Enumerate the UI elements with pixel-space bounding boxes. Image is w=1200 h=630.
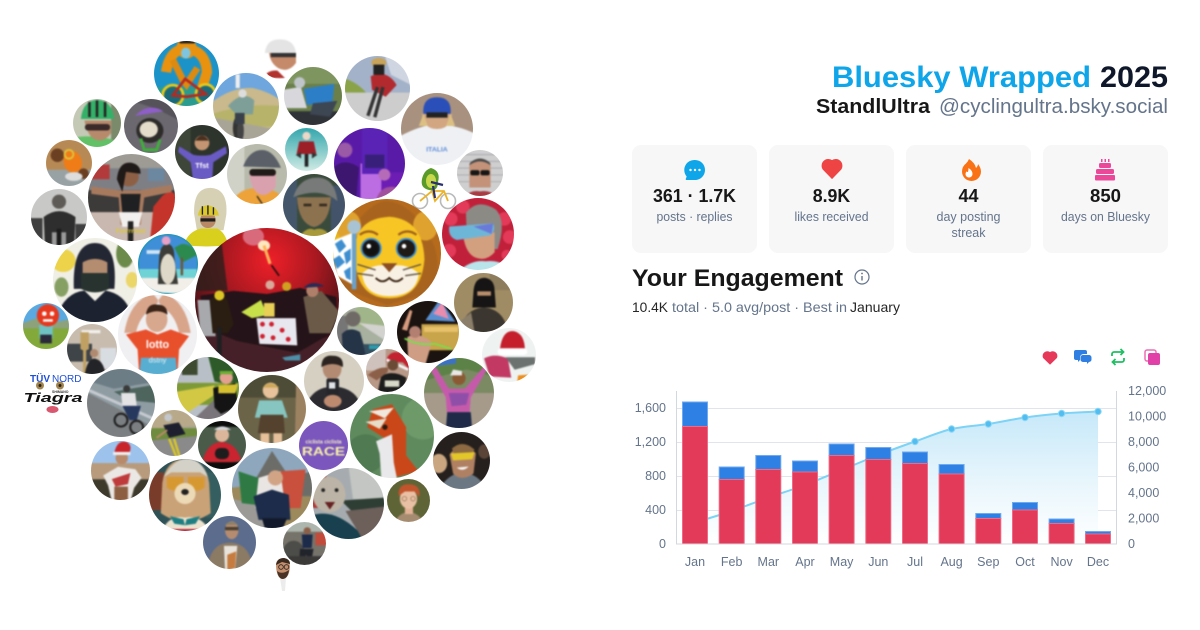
panel: likes received: 8.9K bbox=[813, 186, 850, 206]
month labels: Aug bbox=[940, 555, 963, 569]
panel: likes received bbox=[769, 145, 894, 253]
avatar: red jersey child rider bbox=[198, 421, 246, 469]
avatar: tree-lined rider with black and yellow kit bbox=[177, 357, 239, 419]
left axis labels: 800 bbox=[645, 469, 666, 483]
avatar: angry emoji over meadow bbox=[23, 303, 69, 349]
panel: posts and replies: posts · replies bbox=[656, 210, 732, 224]
month labels bbox=[685, 555, 1109, 569]
panel: days on Bluesky: days on Bluesky bbox=[1061, 210, 1151, 224]
title: 2025 bbox=[1100, 61, 1168, 94]
right axis labels: 12,000 bbox=[1128, 384, 1166, 398]
avatar: rider with hands heart in Lotto kit: dstny bbox=[149, 356, 167, 365]
month labels: Jan bbox=[685, 555, 705, 569]
logo: TÜV Nord Tiagra mashup: SHIMANO bbox=[52, 390, 69, 394]
avatar: rider with hands heart in Lotto kit: lotto bbox=[146, 339, 170, 351]
month labels: Mar bbox=[758, 555, 779, 569]
icon: quote copies bbox=[1145, 350, 1160, 365]
cumulative line bbox=[695, 412, 1098, 523]
avatar: santa on a bike bbox=[285, 128, 328, 171]
avatar: black and white cyclist bbox=[31, 189, 87, 245]
chart legend icons bbox=[1043, 349, 1160, 365]
logo: TÜV Nord Tiagra mashup: NORD bbox=[52, 374, 81, 385]
avatar: rider next to bike in garage bbox=[282, 522, 326, 564]
panel: posts and replies bbox=[632, 145, 757, 253]
avatar: green helmet rider bbox=[73, 99, 121, 147]
engagement summary bbox=[632, 299, 900, 315]
avatar: ciclista ciclista RACE badge bbox=[298, 420, 348, 470]
month labels: Dec bbox=[1087, 555, 1109, 569]
month labels: Feb bbox=[721, 555, 743, 569]
avatar: white helmet rider bbox=[264, 39, 297, 79]
title: Bluesky Wrapped bbox=[832, 61, 1091, 94]
panel: days on Bluesky: 850 bbox=[1090, 186, 1121, 206]
avatar: ciclista ciclista RACE badge: RACE bbox=[301, 444, 345, 458]
avatar: yellow bike climber bbox=[151, 410, 197, 456]
avatar: orange cartoon mouse bbox=[46, 140, 92, 186]
right axis labels: 8,000 bbox=[1128, 435, 1159, 449]
avatar: Italian flag rider with Dolomites bbox=[232, 448, 312, 528]
panel: day posting streak bbox=[906, 145, 1031, 253]
icon: birthday cake bbox=[1095, 159, 1115, 180]
avatar: red haired illustrated person bbox=[386, 478, 430, 522]
avatar: man in cap portrait bbox=[283, 174, 345, 236]
panel: day posting streak: streak bbox=[952, 226, 986, 240]
month labels: Sep bbox=[977, 555, 999, 569]
right axis labels: 2,000 bbox=[1128, 512, 1159, 526]
avatar: rider with hands heart in Lotto kit bbox=[118, 295, 197, 374]
avatar: Italia skinsuit with blue helmet: ITALIA bbox=[426, 147, 448, 154]
avatar: man with giant fork bbox=[67, 324, 117, 374]
month labels: Nov bbox=[1050, 555, 1073, 569]
avatar: man in dark hood on lemon wallpaper bbox=[53, 238, 137, 322]
avatar: man with visor on raspberries bbox=[442, 198, 514, 270]
avatar: purple jersey rider arms out bbox=[175, 125, 229, 179]
avatar: bucket hat and pink mask bbox=[227, 144, 287, 204]
avatar: rider in black vest at race: Forrrrrest bbox=[115, 228, 146, 235]
panel: posts and replies: 361 · 1.7K bbox=[653, 186, 736, 206]
avatar: yellow jersey rider bbox=[186, 188, 227, 246]
grid lines bbox=[676, 408, 1116, 510]
avatar: avocado riding bicycle bbox=[412, 168, 456, 210]
avatar: fur coat gent bbox=[202, 516, 256, 568]
month labels: Oct bbox=[1015, 555, 1035, 569]
right axis labels bbox=[1128, 384, 1166, 551]
cumulative area bbox=[695, 412, 1098, 544]
icon: speech bubble bbox=[684, 160, 705, 180]
right axis labels: 0 bbox=[1128, 537, 1135, 551]
chart: monthly engagement stacked bars with cumulative line bbox=[635, 384, 1166, 569]
avatar: santa hat cyclist with ag2r kit bbox=[90, 440, 150, 500]
user name and handle bbox=[816, 96, 1168, 118]
engagement summary: January bbox=[850, 299, 900, 315]
avatar: yellow visor in crowd bbox=[432, 432, 490, 488]
avatar: bearded memoji bbox=[274, 557, 292, 593]
user name and handle: @cyclingultra.bsky.social bbox=[939, 96, 1168, 118]
red like bars bbox=[682, 426, 1110, 544]
avatar: santa hat man in black tee bbox=[366, 349, 409, 392]
right axis labels: 4,000 bbox=[1128, 486, 1159, 500]
avatar: balaclava man with olive wall bbox=[454, 273, 513, 332]
icon: repost arrows bbox=[1112, 349, 1124, 365]
avatar: bear with cycling glasses bbox=[149, 459, 221, 531]
user name and handle: StandlUltra bbox=[816, 96, 931, 118]
avatar: rider with road view bbox=[87, 369, 155, 437]
left axis labels: 1,600 bbox=[635, 401, 666, 415]
avatar: orange monkey on bicycle bbox=[154, 41, 219, 106]
avatar: cyclist below Mont Ventoux bbox=[213, 73, 279, 139]
avatar: flag waver at night square bbox=[397, 301, 459, 363]
icon: flame bbox=[962, 159, 981, 181]
left axis labels bbox=[635, 401, 666, 551]
avatar: driver in car bbox=[337, 307, 385, 355]
blue reply bars bbox=[682, 402, 1110, 534]
avatar: santa hat fish bbox=[482, 328, 536, 382]
icon: like heart bbox=[1043, 352, 1057, 364]
avatar: purple tinted scene bbox=[334, 128, 405, 199]
logo: TÜV Nord Tiagra mashup: Tiagra bbox=[24, 390, 82, 405]
panel: day posting streak: 44 bbox=[958, 186, 978, 206]
right axis labels: 10,000 bbox=[1128, 410, 1166, 424]
avatar: crimson flare crowd on the Tour bbox=[195, 228, 339, 372]
avatar: pink rider celebrating bbox=[424, 358, 494, 428]
logo: TÜV Nord Tiagra mashup bbox=[24, 372, 82, 413]
avatar: rider in black vest at race bbox=[88, 154, 175, 241]
right axis labels: 6,000 bbox=[1128, 460, 1159, 474]
avatar: older man with sunglasses bbox=[457, 150, 503, 196]
avatar: purple jersey rider arms out: Tfst bbox=[195, 161, 209, 170]
avatar: Italia skinsuit with blue helmet bbox=[401, 93, 473, 165]
panel: likes received: likes received bbox=[794, 210, 869, 224]
icon: heart bbox=[822, 160, 842, 178]
axes bbox=[676, 391, 1116, 544]
avatar: ciclista ciclista RACE badge: ciclista ciclista bbox=[305, 439, 342, 445]
month labels: Apr bbox=[795, 555, 815, 569]
icon: info bbox=[855, 270, 869, 284]
left axis labels: 400 bbox=[645, 503, 666, 517]
avatar: emoji lion with Bavarian flag bbox=[333, 199, 441, 307]
panel: day posting streak: day posting bbox=[936, 210, 1001, 224]
left axis labels: 0 bbox=[659, 537, 666, 551]
avatar: red rider on mountain road bbox=[345, 56, 410, 121]
avatar: blurred cyclist in blue bbox=[284, 67, 342, 125]
heading: your engagement: Your Engagement bbox=[632, 265, 843, 292]
left axis labels: 1,200 bbox=[635, 435, 666, 449]
month labels: Jul bbox=[907, 555, 923, 569]
icon: reply bubbles bbox=[1074, 350, 1092, 364]
avatar: boy in lederhosen bbox=[238, 375, 306, 443]
avatar: penguin on beach bbox=[138, 234, 198, 294]
logo: TÜV Nord Tiagra mashup: TÜV bbox=[30, 372, 50, 385]
avatar: fox from cartoon bbox=[350, 394, 434, 478]
avatar cluster bbox=[23, 39, 536, 591]
engagement summary: total · 5.0 avg/post · Best in bbox=[672, 299, 847, 315]
line markers bbox=[912, 408, 1101, 445]
engagement summary: 10.4K bbox=[632, 299, 669, 315]
panel: days on Bluesky bbox=[1043, 145, 1168, 253]
avatar: selfie in mirror bbox=[304, 351, 364, 411]
month labels: Jun bbox=[868, 555, 888, 569]
avatar: otter-faced man on road bbox=[312, 468, 384, 538]
avatar: hamster under purple umbrella bbox=[124, 99, 178, 153]
month labels: May bbox=[830, 555, 854, 569]
